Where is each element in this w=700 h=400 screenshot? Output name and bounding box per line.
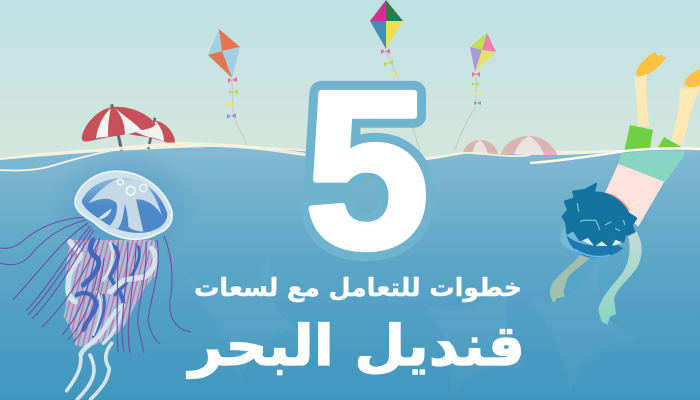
distant beach umbrellas [462, 136, 558, 156]
purple thin tentacles [0, 217, 191, 353]
torso [603, 163, 664, 227]
bell inner pattern [88, 179, 162, 232]
subtitle: خطوات للتعامل مع لسعات [194, 273, 522, 303]
kite: centre [370, 0, 420, 150]
legs [634, 74, 649, 126]
large umbrella [82, 104, 156, 151]
kite: left [208, 29, 247, 145]
hair [563, 184, 636, 247]
water light caustics [180, 260, 640, 395]
jellyfish [0, 147, 203, 399]
beach strip [0, 145, 700, 170]
number 5: 5 [305, 45, 429, 295]
fins [636, 52, 666, 76]
mask surround [560, 223, 627, 257]
shorts [624, 125, 653, 152]
title: قنديل البحر [186, 314, 525, 379]
sky background [0, 0, 700, 165]
beach umbrellas [82, 104, 175, 151]
small umbrella [127, 118, 175, 149]
kite: right [455, 33, 496, 150]
tentacles mass [63, 240, 159, 399]
teal shorts [618, 151, 685, 182]
front arm [598, 232, 642, 325]
swimmer underwater [550, 151, 685, 325]
number 5: 5 [305, 45, 429, 295]
blue ribbons [77, 240, 139, 337]
pink striped mass [63, 240, 159, 347]
back arm [550, 255, 589, 303]
pale ribbons [67, 242, 155, 399]
bell [75, 171, 172, 239]
water surface lines [0, 144, 700, 171]
water body [0, 147, 700, 400]
swimmer legs above water [624, 52, 700, 152]
